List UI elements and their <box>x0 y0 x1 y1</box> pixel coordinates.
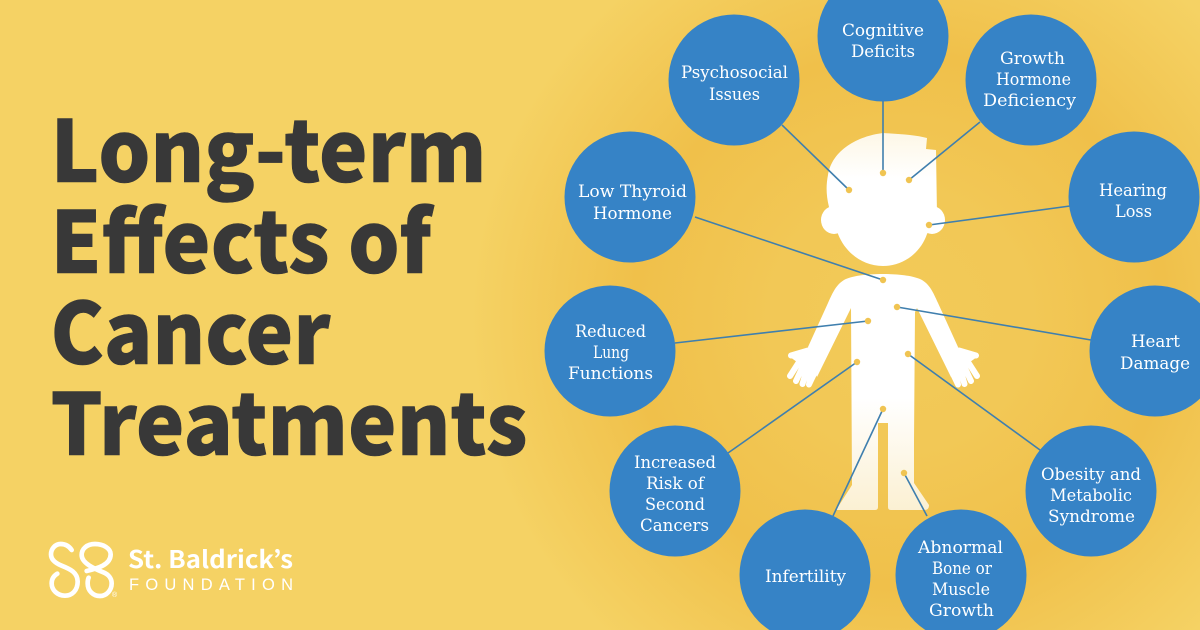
callout: Increased Risk of Second Cancers <box>610 426 740 556</box>
callout: Obesity and Metabolic Syndrome <box>1026 426 1156 556</box>
callout: Abnormal Bone or Muscle Growth: Abnormal <box>917 538 1003 558</box>
title: Treatments <box>50 357 528 480</box>
right hand <box>942 347 977 385</box>
connector lines <box>675 100 1091 516</box>
callout: Infertility <box>740 510 870 630</box>
callout: Infertility: Infertility <box>765 567 846 587</box>
callout: Cognitive Deficits: Deficits <box>851 42 915 62</box>
callout: Growth Hormone Deficiency: Growth <box>1000 49 1065 69</box>
logo: St. Baldrick's Foundation <box>51 540 293 599</box>
callout: Heart Damage <box>1090 286 1200 416</box>
callout: Cognitive Deficits: Cognitive <box>842 21 924 41</box>
callout: Low Thyroid Hormone: Hormone <box>593 204 672 224</box>
callout: Increased Risk of Second Cancers: Second <box>645 495 705 515</box>
registered mark: ® <box>112 591 118 599</box>
callout: Psychosocial Issues: Psychosocial <box>681 63 788 83</box>
head <box>821 133 945 266</box>
icon: SB monogram <box>51 544 112 596</box>
body figure <box>790 133 977 510</box>
callout: Hearing Loss: Hearing <box>1099 181 1167 201</box>
callout: Abnormal Bone or Muscle Growth: Growth <box>929 601 994 621</box>
callout: Growth Hormone Deficiency <box>966 14 1096 146</box>
callout: Reduced Lung Functions: Lung <box>593 343 629 363</box>
title: Cancer <box>50 266 331 389</box>
callout: Reduced Lung Functions <box>544 286 676 416</box>
left hand <box>790 347 825 385</box>
callout: Reduced Lung Functions: Functions <box>568 364 653 384</box>
callout: Hearing Loss: Loss <box>1115 202 1152 222</box>
callout: Increased Risk of Second Cancers: Increased <box>634 453 716 473</box>
callout: Low Thyroid Hormone: Low Thyroid <box>578 182 687 202</box>
callout: Abnormal Bone or Muscle Growth: Muscle <box>932 580 990 600</box>
callout: Cognitive Deficits <box>818 0 948 102</box>
callout: Hearing Loss <box>1068 132 1200 262</box>
callout: Psychosocial Issues <box>668 14 800 146</box>
callout: Abnormal Bone or Muscle Growth <box>896 510 1026 630</box>
callout: Obesity and Metabolic Syndrome: Metabolic <box>1050 486 1132 506</box>
callout: Heart Damage: Heart <box>1131 332 1180 352</box>
title: Long-term <box>50 84 486 207</box>
callout: Heart Damage: Damage <box>1120 354 1190 374</box>
callout: Reduced Lung Functions: Reduced <box>575 322 646 342</box>
callout: Increased Risk of Second Cancers: Risk of <box>646 474 706 494</box>
callout: Low Thyroid Hormone <box>564 132 696 262</box>
callout: Abnormal Bone or Muscle Growth: Bone or <box>932 559 993 579</box>
torso, arms and legs <box>808 274 958 510</box>
title <box>50 84 528 480</box>
callout: Obesity and Metabolic Syndrome: Obesity and <box>1041 465 1141 485</box>
body location dots <box>846 170 932 476</box>
logo wordmark: St. Baldrick’s <box>128 540 293 575</box>
logo tagline: FOUNDATION <box>129 576 293 594</box>
title: Effects of <box>50 175 435 298</box>
callout: Growth Hormone Deficiency: Hormone <box>996 70 1071 90</box>
callout: Obesity and Metabolic Syndrome: Syndrome <box>1048 507 1135 527</box>
callout: Psychosocial Issues: Issues <box>709 85 760 105</box>
callout: Increased Risk of Second Cancers: Cancers <box>640 516 709 536</box>
callout: Growth Hormone Deficiency: Deficiency <box>983 91 1076 111</box>
